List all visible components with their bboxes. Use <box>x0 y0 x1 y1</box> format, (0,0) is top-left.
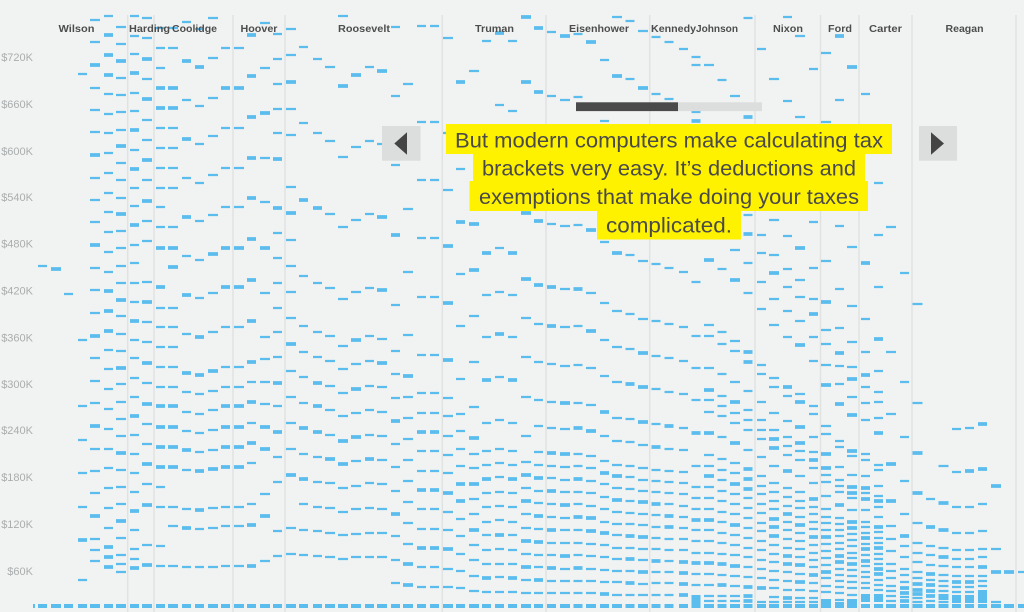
y-axis income labels: $240K <box>1 425 34 437</box>
president name labels: Eisenhower <box>569 23 629 35</box>
president name labels: Kennedy <box>651 23 696 35</box>
dashes: Wilson years <box>38 16 126 580</box>
president name labels: Harding <box>129 23 170 35</box>
president name labels: Johnson <box>696 23 738 35</box>
dashes: Hoover years <box>234 23 282 566</box>
dashes: Ford years <box>821 36 857 600</box>
button: next arrow <box>919 126 957 161</box>
dashes: Roosevelt years <box>286 16 439 587</box>
y-axis income labels: $420K <box>1 286 34 298</box>
y-axis income labels: $360K <box>1 332 34 344</box>
dashes: Coolidge years <box>156 18 230 567</box>
dashes: Truman years <box>443 17 543 593</box>
president name labels: Hoover <box>240 23 278 35</box>
dashes: Carter years <box>861 94 909 601</box>
y-axis income labels: $300K <box>1 379 34 391</box>
president name labels: Ford <box>828 23 852 35</box>
highlighted caption <box>446 124 892 240</box>
highlighted caption: complicated. <box>606 214 732 238</box>
y-axis income labels: $60K <box>7 566 34 578</box>
y-axis income labels: $180K <box>1 472 34 484</box>
dashes: Harding years <box>130 16 152 568</box>
president name labels: Roosevelt <box>338 23 391 35</box>
dashes: Eisenhower years <box>547 17 648 595</box>
president name labels: Reagan <box>946 23 984 35</box>
tall low-income bracket blocks <box>692 590 987 608</box>
president name labels: Coolidge <box>172 23 217 35</box>
baseline bracket dashes <box>33 604 1024 608</box>
dashes: Reagan years <box>912 304 1024 602</box>
highlighted caption: brackets very easy. It’s deductions and <box>482 156 856 180</box>
highlighted caption: exemptions that make doing your taxes <box>479 185 859 209</box>
y-axis income labels: $720K <box>1 52 34 64</box>
y-axis income labels: $540K <box>1 192 34 204</box>
y-axis income labels <box>1 52 34 578</box>
y-axis income labels: $120K <box>1 519 34 531</box>
dashes: Kennedy and Johnson years <box>652 18 752 601</box>
progress bar <box>576 102 762 111</box>
dashes: Nixon years <box>757 17 818 602</box>
president name labels: Nixon <box>773 23 803 35</box>
highlighted caption: But modern computers make calculating tax <box>455 128 883 152</box>
president name labels: Truman <box>475 23 514 35</box>
president name labels <box>58 23 984 35</box>
button: previous arrow <box>382 126 420 161</box>
president name labels: Wilson <box>58 23 94 35</box>
y-axis income labels: $660K <box>1 99 34 111</box>
y-axis income labels: $600K <box>1 146 34 158</box>
president name labels: Carter <box>869 23 902 35</box>
y-axis income labels: $480K <box>1 238 34 250</box>
